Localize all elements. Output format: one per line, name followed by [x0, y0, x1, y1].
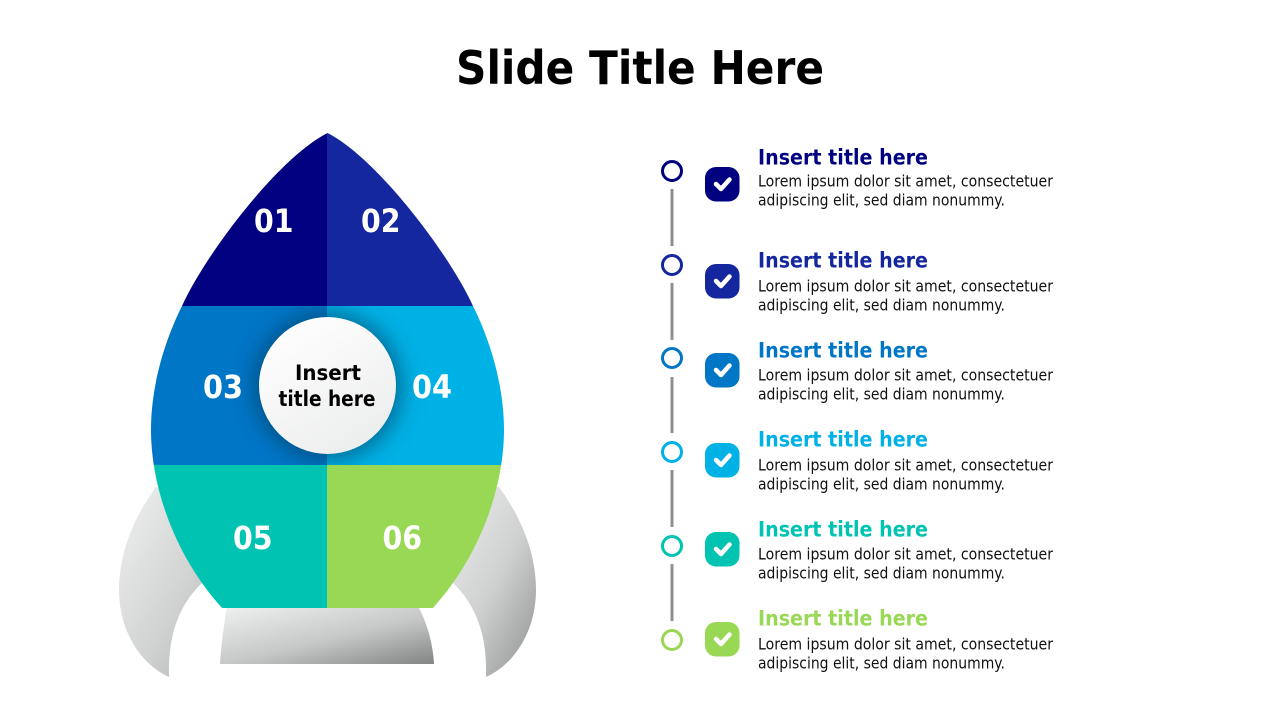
segment 04 — [327, 306, 517, 465]
circle shadow — [254, 312, 402, 460]
segment 02 — [327, 133, 473, 306]
item 1 text — [758, 172, 1053, 210]
timeline node 4 — [662, 442, 682, 462]
item 2 text: adipiscing elit, sed diam nonummy. — [758, 296, 1005, 314]
number 02: 02 — [361, 202, 400, 240]
segment 03 — [140, 306, 328, 465]
center circle — [259, 317, 396, 454]
item 4 text — [758, 456, 1053, 494]
timeline node 1 — [662, 162, 682, 180]
segment 01 — [182, 133, 328, 306]
segment 06 — [327, 465, 502, 608]
item 1 text: adipiscing elit, sed diam nonummy. — [758, 190, 1005, 210]
timeline node 2 — [662, 256, 682, 274]
item 5 text: Lorem ipsum dolor sit amet, consectetuer — [758, 544, 1053, 564]
title: Slide Title Here — [456, 41, 824, 95]
item 6 text: adipiscing elit, sed diam nonummy. — [758, 654, 1005, 672]
item 3 text: Lorem ipsum dolor sit amet, consectetuer — [758, 366, 1053, 384]
item 1 — [705, 146, 1053, 210]
item 6 heading: Insert title here — [758, 606, 928, 630]
item 5 text — [758, 544, 1053, 582]
item 6 text — [758, 634, 1053, 672]
center label — [278, 361, 376, 411]
item 4 text: Lorem ipsum dolor sit amet, consectetuer — [758, 456, 1053, 474]
icon: check 6 — [705, 622, 740, 656]
item 2 — [705, 248, 1053, 314]
number 05: 05 — [233, 519, 272, 557]
icon: check 3 — [705, 353, 740, 388]
item 2 heading: Insert title here — [758, 248, 928, 272]
icon: check 1 — [705, 167, 740, 202]
item 3 text: adipiscing elit, sed diam nonummy. — [758, 384, 1005, 404]
rocket body segments — [140, 125, 517, 615]
item 1 text: Lorem ipsum dolor sit amet, consectetuer — [758, 172, 1053, 190]
timeline node 5 — [662, 536, 682, 556]
item 6 — [705, 606, 1053, 672]
item 2 text: Lorem ipsum dolor sit amet, consectetuer — [758, 276, 1053, 296]
item 2 text — [758, 276, 1053, 314]
icon: check 5 — [705, 532, 740, 566]
item 3 text — [758, 366, 1053, 404]
item 6 text: Lorem ipsum dolor sit amet, consectetuer — [758, 634, 1053, 654]
segment 05 — [154, 465, 327, 608]
item 1 heading: Insert title here — [758, 146, 928, 170]
number 03: 03 — [203, 368, 243, 406]
timeline node 6 — [662, 630, 682, 650]
item 4 — [705, 428, 1053, 494]
rocket illustration — [119, 125, 536, 677]
item 4 heading: Insert title here — [758, 428, 928, 452]
right fin — [435, 487, 536, 677]
number 01: 01 — [254, 202, 294, 240]
number 06: 06 — [382, 519, 422, 557]
timeline — [662, 162, 682, 650]
item 3 — [705, 338, 1053, 404]
icon: check 4 — [705, 443, 740, 478]
item 5 text: adipiscing elit, sed diam nonummy. — [758, 564, 1005, 582]
item 5 — [705, 518, 1053, 582]
center label: Insert — [295, 361, 361, 385]
center label: title here — [278, 387, 376, 411]
engine nozzle — [220, 606, 434, 664]
timeline node 3 — [662, 348, 682, 368]
number 04: 04 — [412, 368, 452, 406]
left fin — [119, 487, 220, 677]
icon: check 2 — [705, 264, 740, 298]
item 3 heading: Insert title here — [758, 338, 928, 362]
item 4 text: adipiscing elit, sed diam nonummy. — [758, 474, 1005, 494]
item 5 heading: Insert title here — [758, 518, 928, 542]
